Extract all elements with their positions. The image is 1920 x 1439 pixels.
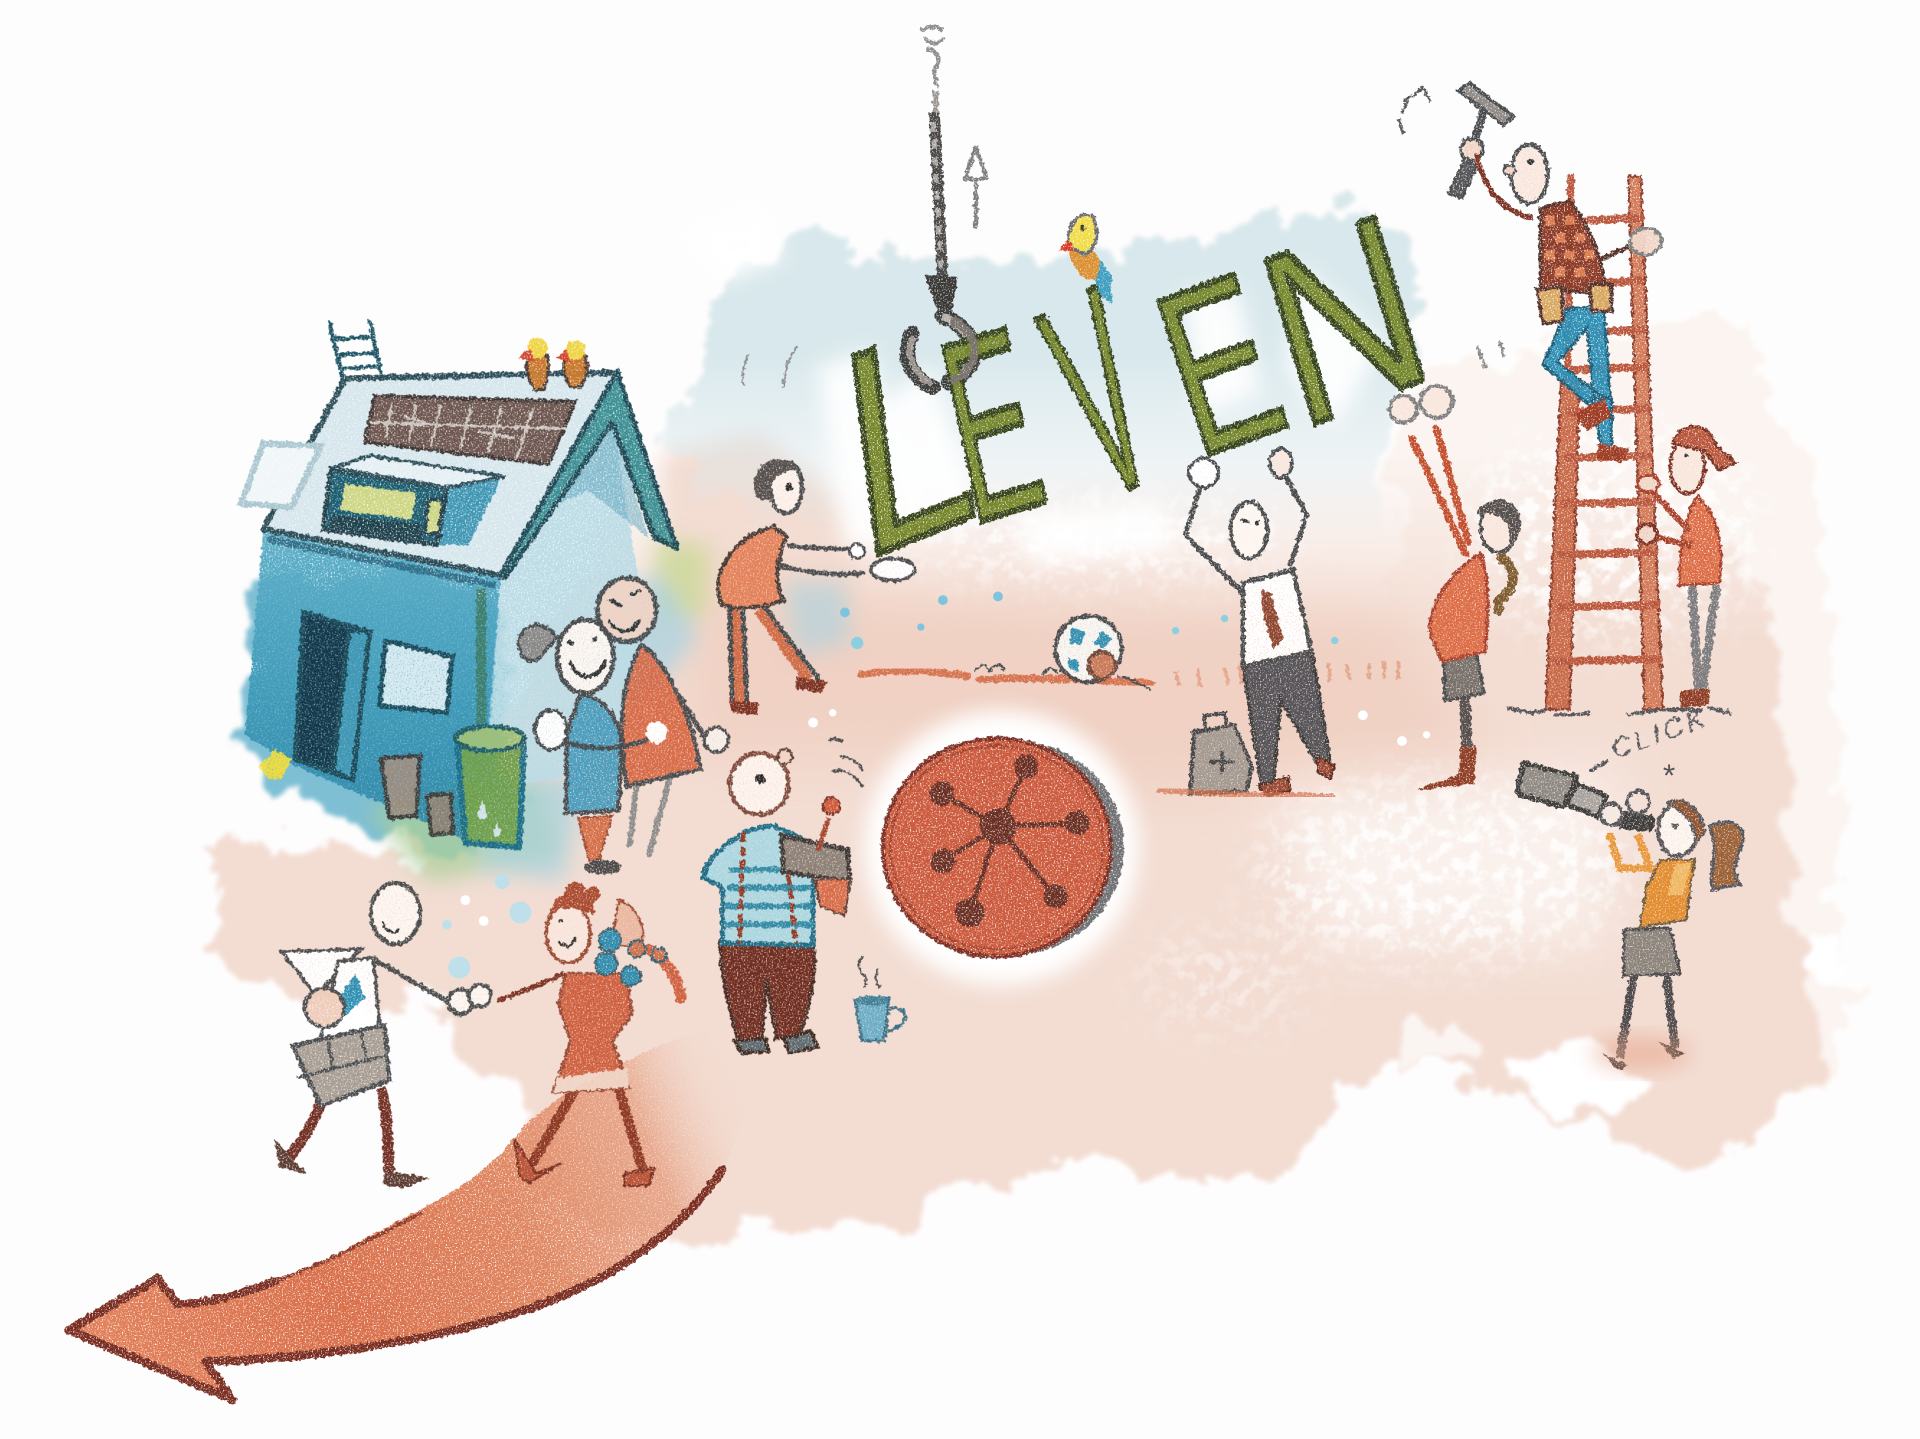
person: remote control box: [781, 835, 850, 882]
background wash: pink at left beside house: [661, 429, 857, 637]
person: hammer: [1449, 83, 1513, 198]
person: skirt: [1624, 928, 1680, 976]
person: telescope: [1517, 763, 1653, 829]
icon: parrot on letter V: [1058, 215, 1112, 304]
person: shirt: [1243, 570, 1311, 666]
person: cap: [1673, 426, 1735, 470]
person: hands: [1600, 803, 1622, 825]
house: water barrel: [456, 726, 524, 847]
person: head: [1658, 805, 1697, 856]
person: shoes: [735, 1031, 818, 1053]
label: click asterisk: *: [1663, 757, 1675, 793]
house: gable shading: [551, 419, 649, 539]
heading: LEVEN hand lettering: L: [829, 256, 988, 622]
house: solar panel: [365, 396, 576, 464]
person: pushing letter L: [718, 460, 915, 715]
person: man in tie lifting letters: [1185, 448, 1335, 796]
person: tool belt: [1537, 284, 1611, 323]
house: dormer: [323, 456, 504, 545]
person: head: [730, 753, 789, 814]
person: arms: [1610, 836, 1670, 868]
person: arms: [1653, 492, 1690, 545]
person: braid: [1499, 557, 1513, 610]
person: trousers: [720, 941, 814, 1047]
person: ponytail: [1709, 822, 1744, 889]
person: man holding remote control: [703, 739, 862, 1053]
person: arm to handshake: [377, 961, 448, 1002]
icon: red network button: [883, 738, 1124, 956]
person: legs: [1692, 585, 1717, 692]
person: woman holding letter N: [1390, 386, 1521, 790]
person: legs: [534, 1087, 644, 1173]
person: jeans: [1543, 306, 1611, 448]
person: head: [546, 904, 590, 963]
background wash: main pink: [202, 404, 1837, 1237]
person: shoulder triangle: [282, 949, 361, 996]
person: legs: [735, 609, 808, 703]
person: striped shirt: [703, 825, 842, 945]
person: helper holding ladder: [1637, 426, 1735, 708]
icon: house with solar panels: [241, 321, 677, 847]
person: legs: [1620, 976, 1675, 1058]
ground: orange scribble under ball: [861, 671, 1151, 683]
background wash: blue sky behind LEVEN: [654, 189, 1428, 496]
background: house blue wash: [239, 576, 514, 857]
house: side dormer ghost: [241, 443, 321, 507]
heading: LEVEN hand lettering: V: [1014, 229, 1185, 561]
person: bouquet: [595, 900, 666, 986]
person: raised arm: [1477, 157, 1531, 218]
background: white smudges around letters: [686, 208, 1384, 563]
person: hand on shoulder: [305, 988, 344, 1027]
button: network nodes: [929, 754, 1090, 927]
person: checked shirt: [1540, 201, 1607, 294]
house: door leaf: [333, 630, 370, 779]
house: door: [295, 612, 370, 779]
background: white speckle texture: [937, 432, 1754, 1028]
house: eave edge: [267, 539, 496, 585]
background: green and blue wash under house: [367, 539, 851, 882]
icon: rope with hook: [907, 27, 974, 387]
house: left wall: [245, 529, 501, 838]
person: shoes: [1573, 398, 1629, 463]
person: leg: [1464, 696, 1467, 747]
button: network lines: [942, 767, 1078, 912]
person: woman with flower bouquet: [500, 882, 681, 1185]
icon: two birds on roof: [518, 337, 587, 390]
ground: hatch marks: [1176, 661, 1398, 686]
person: trousers: [1243, 649, 1330, 784]
person: woman in blue with ponytail: [518, 620, 622, 874]
heading: LEVEN hand lettering: [829, 161, 1454, 622]
house: right wall: [490, 419, 649, 784]
icon: tall ladder: [1545, 174, 1663, 709]
person: torso: [1640, 860, 1695, 927]
person: torso: [718, 527, 786, 608]
person: shoes: [1259, 757, 1335, 796]
person: torso: [1679, 496, 1721, 585]
house: gable trim: [501, 372, 677, 578]
person: head: [1480, 501, 1517, 552]
person: briefcase: [293, 1025, 389, 1106]
person: other arm: [1599, 241, 1641, 260]
house: drain pipe: [477, 588, 485, 731]
label: click dash: [1592, 761, 1608, 770]
icon: doctor bag: [1190, 713, 1251, 794]
person: man with briefcase: [274, 883, 491, 1188]
icon: glow around button: [864, 710, 1139, 985]
person: arm: [500, 974, 563, 999]
icon: football: [975, 616, 1151, 691]
heading: LEVEN hand lettering: E: [1131, 223, 1309, 506]
background: white brush gaps at lower edge: [1396, 936, 1856, 1114]
ground: shadow under man in tie: [1157, 790, 1335, 796]
person: legs: [287, 1092, 389, 1173]
person: man in orange dress: [566, 578, 729, 855]
label: CLICK sound text: CLICK: [1607, 701, 1712, 765]
person: head: [1670, 440, 1704, 494]
person: hands: [1390, 396, 1417, 423]
person: skirt: [1444, 654, 1484, 701]
person: torso: [1430, 554, 1488, 661]
person: motion marks: [1398, 88, 1430, 132]
house: yellow flowers: [260, 750, 291, 779]
person: head: [770, 462, 802, 513]
background wash: stronger pink band: [686, 576, 1494, 796]
background: confetti dots: [442, 592, 1430, 978]
marks: motion lines beside N: [1478, 343, 1504, 367]
background wash: pale upper right: [1347, 318, 1849, 1151]
person: woman with telescope camera: [1517, 763, 1744, 1070]
person: head: [371, 883, 420, 944]
house: buckets: [381, 756, 453, 835]
icon: up arrow beside rope: [965, 147, 987, 227]
person: arms: [1185, 473, 1307, 593]
heading: LEVEN hand lettering: N: [1236, 161, 1454, 481]
house: window: [380, 641, 452, 713]
person: arms: [781, 546, 862, 574]
person: carpenter on ladder: [1398, 83, 1662, 463]
marks: motion lines beside L: [743, 348, 796, 387]
icon: hook ring over letter E: [954, 321, 975, 380]
person: arms: [1412, 429, 1468, 554]
ground: scribble under ladder: [1509, 708, 1729, 715]
person: shirt: [321, 958, 380, 1038]
background wash: mottled pale patch: [1273, 772, 1616, 943]
person: head: [1231, 502, 1267, 558]
house: roof: [263, 372, 617, 576]
house: roof ladder: [329, 321, 382, 378]
person: dress: [553, 974, 632, 1092]
person: signal waves: [830, 739, 862, 786]
icon: coffee cup with steam: [855, 958, 905, 1041]
person: head: [1511, 145, 1548, 203]
heading: LEVEN hand lettering: E: [921, 272, 1063, 579]
ground: shadow under camera woman: [1592, 1036, 1690, 1070]
arrow: large curved orange arrow: [69, 1029, 749, 1400]
